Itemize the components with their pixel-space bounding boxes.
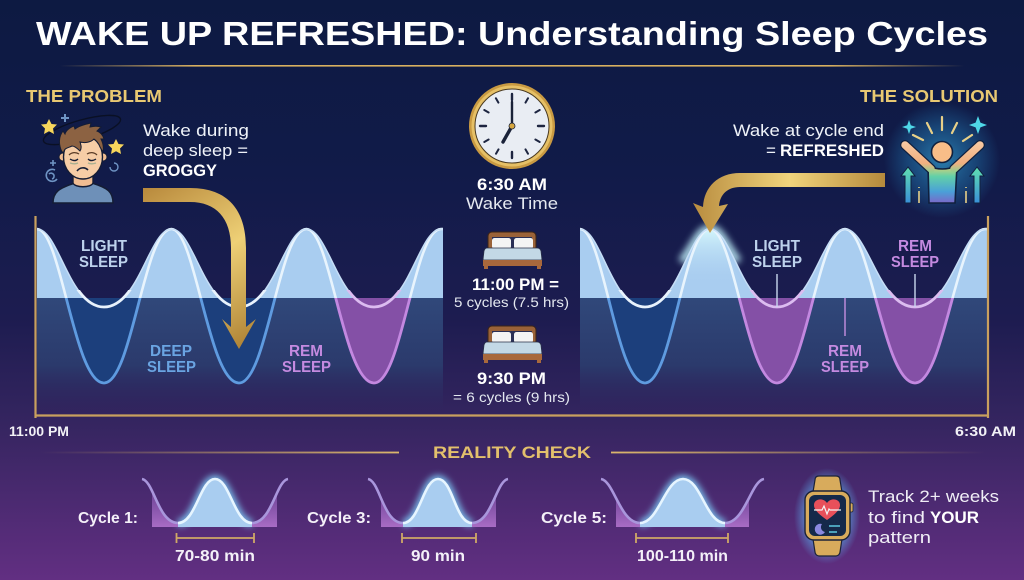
cycle 5: Cycle 5: bbox=[541, 510, 607, 527]
text: tracking tip: Track 2+ weeks bbox=[868, 487, 999, 506]
text: wake time: Wake Time bbox=[466, 194, 558, 213]
text: solution statement bbox=[733, 121, 884, 160]
label: deep sleep bbox=[147, 343, 196, 376]
text: problem statement: deep sleep = bbox=[143, 141, 248, 160]
label: light sleep: SLEEP bbox=[79, 254, 128, 271]
label: rem sleep upper: SLEEP bbox=[891, 254, 939, 271]
panel: the problem bbox=[26, 86, 249, 203]
icon: bed 1 bbox=[483, 232, 542, 269]
cycle 1: Cycle 1: bbox=[78, 510, 138, 527]
heading: reality check: REALITY CHECK bbox=[433, 443, 592, 462]
label: light sleep: LIGHT bbox=[754, 238, 801, 255]
arrow: into deep sleep bbox=[143, 188, 256, 349]
text: tracking tip: YOUR bbox=[930, 508, 979, 527]
label: rem sleep lower bbox=[821, 343, 869, 376]
text: 9:30pm: 9:30 PM bbox=[477, 369, 546, 388]
cycle 3: 90 min bbox=[411, 548, 465, 565]
label: rem sleep lower: REM bbox=[828, 343, 862, 360]
highlight: wake point glow bbox=[682, 229, 738, 262]
text: tracking tip bbox=[868, 487, 999, 547]
chart: right sleep cycle (solution) bbox=[580, 229, 987, 410]
timeline axis bbox=[35, 216, 988, 418]
heading: the problem: THE PROBLEM bbox=[26, 86, 162, 106]
leader lines bbox=[777, 274, 915, 307]
label: deep sleep: DEEP bbox=[150, 343, 192, 360]
label: light sleep: SLEEP bbox=[752, 254, 802, 271]
icon: refreshed person bbox=[884, 102, 1000, 218]
text: 11pm: 11:00 PM = bbox=[472, 275, 559, 294]
text: wake time: 6:30 AM bbox=[477, 175, 547, 194]
text: solution statement: REFRESHED bbox=[780, 141, 884, 160]
text: solution statement: Wake at cycle end bbox=[733, 121, 884, 140]
label: light sleep: LIGHT bbox=[81, 238, 128, 255]
text: 9:30pm bbox=[453, 369, 570, 405]
cycle 1: 70-80 min bbox=[175, 548, 255, 565]
text: tracking tip: to find bbox=[868, 508, 925, 527]
label: light sleep bbox=[752, 238, 802, 271]
label: start time: 11:00 PM bbox=[9, 424, 69, 439]
label: rem sleep lower: SLEEP bbox=[821, 359, 869, 376]
icon: clock bbox=[469, 83, 555, 169]
chart: left sleep cycle (problem) bbox=[37, 228, 443, 388]
label: end time: 6:30 AM bbox=[955, 424, 1016, 439]
label: rem sleep bbox=[282, 343, 331, 376]
cycle 3 bbox=[307, 479, 508, 565]
heading: the solution: THE SOLUTION bbox=[860, 86, 998, 106]
icon: bed 2 bbox=[483, 326, 542, 363]
text: 11pm: 5 cycles (7.5 hrs) bbox=[454, 294, 569, 310]
label: rem sleep: SLEEP bbox=[282, 359, 331, 376]
label: deep sleep: SLEEP bbox=[147, 359, 196, 376]
text: 9:30pm: = 6 cycles (9 hrs) bbox=[453, 389, 570, 405]
label: rem sleep: REM bbox=[289, 343, 323, 360]
text: problem statement: GROGGY bbox=[143, 161, 218, 180]
panel: the solution bbox=[733, 86, 1000, 218]
icon: groggy person bbox=[41, 109, 124, 203]
text: problem statement: Wake during bbox=[143, 121, 249, 140]
text: problem statement bbox=[143, 121, 249, 180]
title: WAKE UP REFRESHED: Understanding Sleep Cycles bbox=[36, 15, 988, 52]
label: rem sleep upper: REM bbox=[898, 238, 932, 255]
icon: smartwatch bbox=[794, 468, 860, 564]
cycle 3: Cycle 3: bbox=[307, 510, 371, 527]
cycle 1 bbox=[78, 479, 288, 565]
text: wake time bbox=[466, 175, 558, 213]
cycle 5: 100-110 min bbox=[637, 548, 728, 565]
label: light sleep bbox=[79, 238, 128, 271]
cycle 5 bbox=[541, 479, 764, 565]
text: solution statement: = bbox=[766, 141, 776, 160]
panel: centre schedule bbox=[453, 83, 570, 405]
text: tracking tip: pattern bbox=[868, 528, 931, 547]
label: rem sleep upper bbox=[891, 238, 939, 271]
arrow: to cycle end bbox=[693, 173, 885, 233]
text: 11pm bbox=[454, 275, 569, 310]
panel: reality check bbox=[40, 443, 999, 565]
